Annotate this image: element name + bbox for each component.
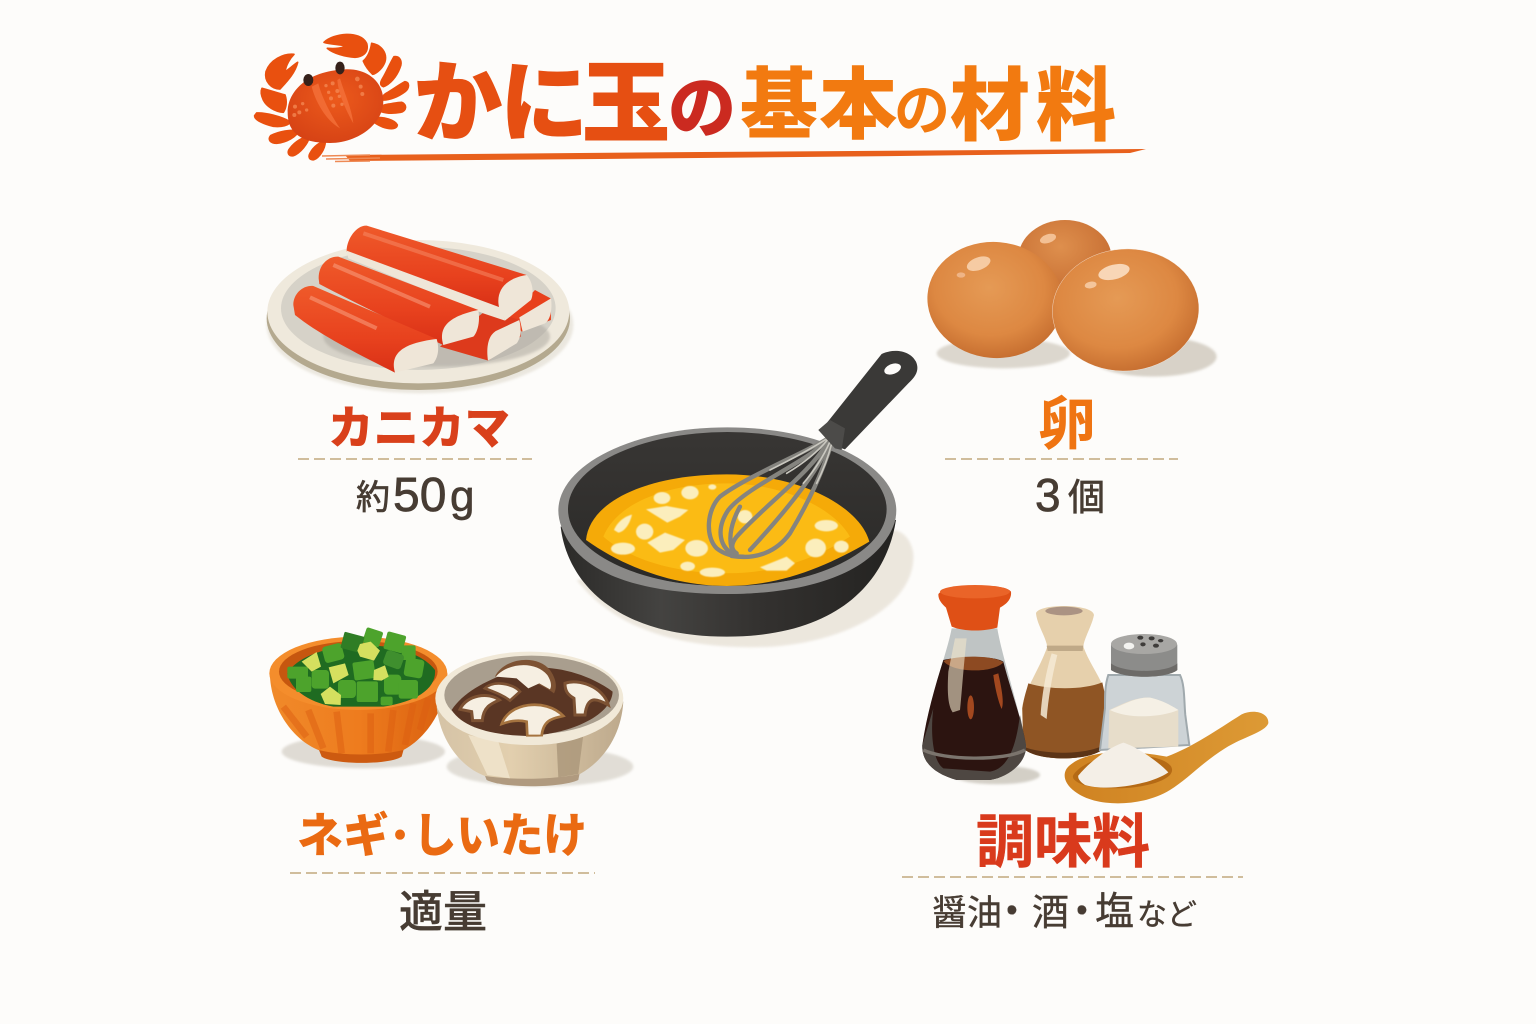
title text: zairyo: 材 [950,42,1030,158]
amount: about 50g: g [450,472,474,521]
label: negi and shiitake: しいたけ [413,797,587,866]
amount: soy sauce, sake, salt etc: など [1137,890,1197,934]
illustration: three eggs [923,220,1217,377]
beige bowl [483,772,580,786]
title text: kanitama [414,33,670,160]
whisk wire highlights [770,439,832,483]
panel: seasonings [902,585,1268,937]
divider [945,458,1178,460]
title text: zairyo [950,42,1116,158]
illustration: plate of crab sticks [267,226,573,393]
soy bottle shadow [953,766,1040,784]
label: negi and shiitake: · [386,800,414,866]
title text: zairyo: 料 [1036,42,1116,158]
whisk wires [709,439,832,557]
pan rim [558,427,896,594]
label: negi and shiitake [297,797,587,866]
title text: kihon: 基 [740,43,818,155]
pan shadow [577,530,913,647]
spoon [1065,712,1268,803]
amount: about 50g [356,469,474,522]
chopped green onions [287,627,435,707]
title text: kanitama: か [414,33,502,160]
whisk handle [818,351,917,450]
panel: frying pan with whisk [558,351,917,647]
label: seasonings: 調味料 [976,795,1150,879]
amount: 3 pieces: 個 [1068,467,1105,521]
sake bottle [1022,606,1104,758]
title text: kihon: 本 [819,43,897,155]
title text: kanitama: 玉 [582,33,670,160]
soy bottle cap [938,586,1011,631]
amount: soy sauce, sake, salt etc [932,879,1197,937]
amount: soy sauce, sake, salt etc: · [1070,879,1094,937]
divider [298,458,532,460]
bowl shadows [282,735,445,768]
title text: no 2: の [894,66,950,147]
panel: eggs [923,220,1217,521]
panel: green onion and shiitake [269,627,633,940]
amount: soy sauce, sake, salt etc: 酒 [1032,882,1069,936]
amount: soy sauce, sake, salt etc: 醤油 [932,885,1002,936]
amount: about 50g: 約 [356,470,390,519]
title text: kihon [740,43,897,155]
beaten egg [586,474,869,586]
illustration: two bowls [269,627,633,787]
amount: about 50g: 50 [393,469,446,522]
illustration: soy sauce, sake, salt, spoon [922,585,1268,803]
amount: soy sauce, sake, salt etc: 塩 [1095,881,1134,937]
title underline brush stroke [322,149,1146,162]
panel: crab sticks [267,226,573,522]
soy bottle [922,628,1026,780]
salt shaker [1100,675,1189,750]
divider [290,872,595,874]
rim front edge [560,517,896,594]
title text: no: の [668,53,736,152]
divider [902,876,1243,878]
amount: 3 pieces: 3 [1035,469,1061,521]
label: negi and shiitake: ネギ [297,797,389,866]
amount: soy sauce, sake, salt etc: · [1000,879,1024,937]
amount: 3 pieces [1035,467,1105,521]
label: egg: 卵 [1038,377,1096,461]
title block [255,33,1146,162]
orange bowl [318,748,404,763]
pan body [561,520,896,637]
title text: kanitama: に [500,33,588,160]
shiitake mushrooms [452,660,613,736]
icon: crab [255,34,408,160]
label: kanikama: カニカマ [328,392,510,458]
pan interior [568,432,887,587]
amount: appropriate: 適量 [399,876,487,940]
